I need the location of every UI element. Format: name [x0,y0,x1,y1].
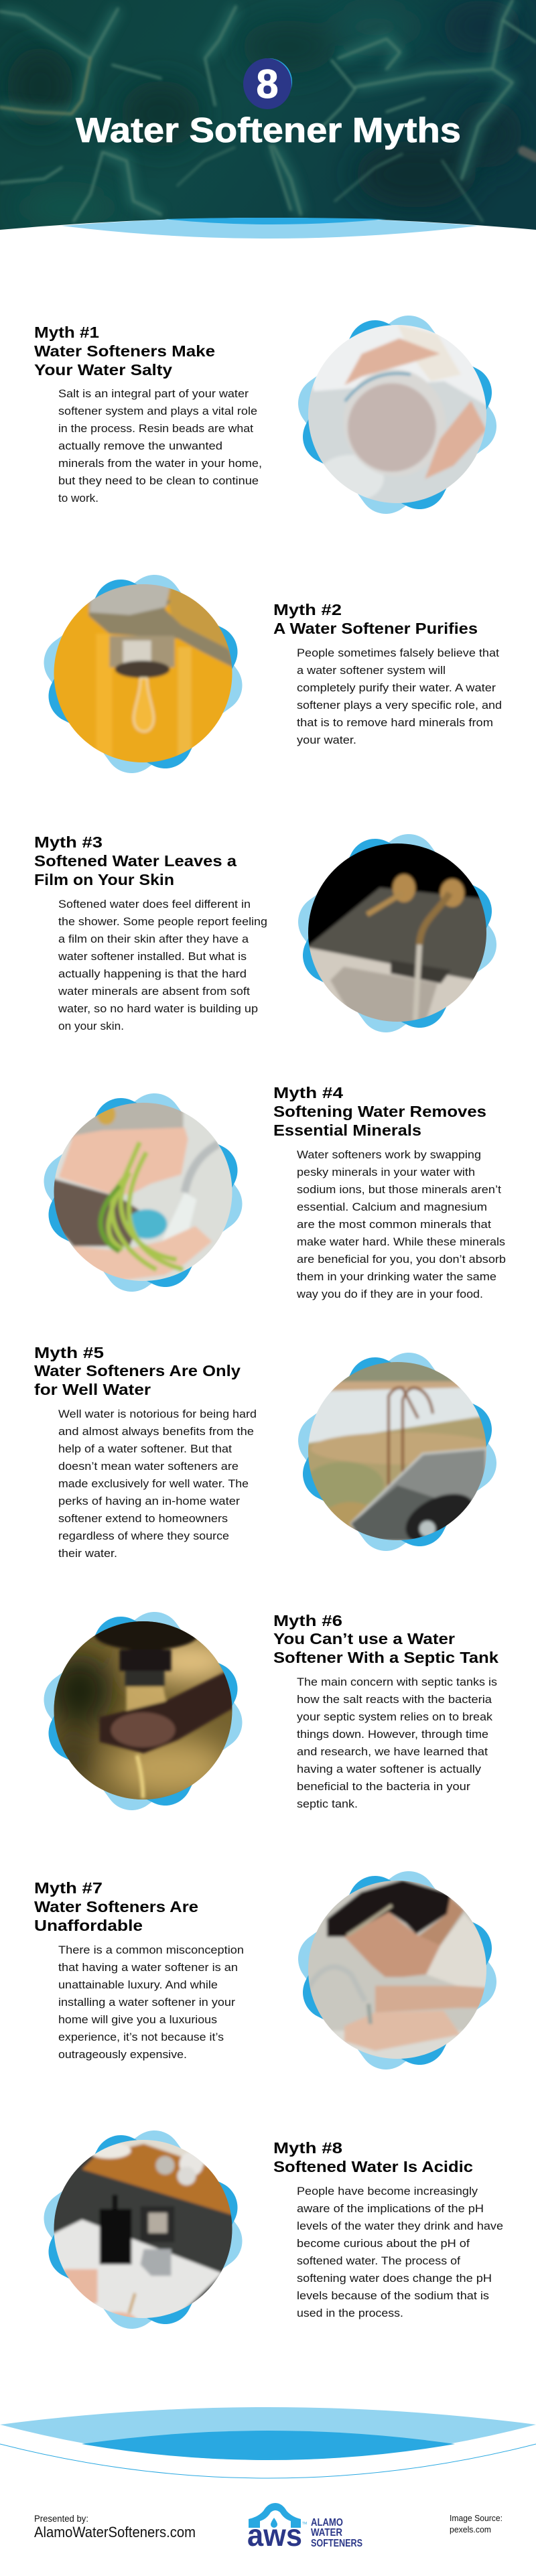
text: myth 4 body: way you do if they are in your food. [296,1288,483,1300]
heading: myth 4: Essential Minerals [273,1122,421,1139]
text: myth 3 body: Softened water does feel different in [58,898,251,910]
panel: myth 2 [50,580,502,768]
text: myth 7 body: installing a water softener in your [58,1996,236,2009]
footer wave [0,2407,536,2478]
text: myth 1 body: softener system and plays a vital role [58,405,257,417]
footer: image source: Image Source: [450,2513,503,2523]
panel: myth 4 [50,1084,506,1300]
text: myth 8 body: used in the process. [297,2307,403,2319]
footer: presented by: Presented by: [34,2513,88,2524]
panel: myth 7 [34,1877,491,2064]
text: myth 3 body [58,898,267,1032]
thin wave line [0,2444,536,2478]
heading: myth 3: Film on Your Skin [34,871,174,888]
logo: Alamo Water Softeners: TM [302,2522,307,2526]
text: myth 2 body: your water. [297,734,356,746]
text: myth 6 body [297,1676,497,1810]
footer: presented by [34,2513,196,2540]
panel: myth 5 [34,1344,498,1560]
text: myth 8 body [297,2185,503,2319]
text: myth 6 body: beneficial to the bacteria in your [297,1781,471,1793]
dark blue lens [82,2431,455,2460]
text: myth 7 body [58,1944,244,2061]
text: myth 5 body: perks of having an in-home water [58,1495,241,1507]
heading: myth 5: Water Softeners Are Only [34,1362,241,1379]
text: myth 1 body: in the process. Resin beads are what [58,423,253,435]
text: myth 8 body: levels of the water they drink and have [297,2220,503,2232]
text: myth 6 body: how the salt reacts with the bacteria [297,1694,492,1706]
text: myth 6 body: The main concern with septic tanks is [297,1676,497,1688]
logo: Alamo Water Softeners [247,2503,362,2553]
text: myth 8 body: People have become increasingly [297,2185,478,2197]
text: myth 4 body: essential. Calcium and magnesium [297,1201,487,1213]
heading: myth 7: Unaffordable [34,1917,143,1934]
heading: myth 8 [273,2139,473,2175]
panel: myth 3 [34,833,491,1032]
heading: myth 4: Myth #4 [273,1084,343,1101]
text: myth 2 body: that is to remove hard minerals from [297,717,493,729]
text: myth 1 body: but they need to be clean to continue [58,475,259,487]
footer: presented by: AlamoWaterSofteners.com [34,2524,196,2540]
text: myth 3 body: actually happening is that the hard [58,968,247,980]
text: myth 6 body: having a water softener is actually [297,1763,482,1775]
text: myth 1 body: minerals from the water in your home, [58,458,262,470]
text: myth 3 body: the shower. Some people report feeling [58,916,267,928]
text: myth 6 body: your septic system relies on to break [297,1711,493,1723]
text: myth 2 body: completely purify their water. A water [297,682,496,694]
text: myth 7 body: that having a water softener is an [58,1962,238,1974]
text: myth 6 body: and research, we have learned that [297,1746,488,1758]
heading: myth 5 [34,1344,241,1398]
photo: hands rinsing green vegetables under faucet [50,1099,237,1286]
heading: myth 5: Myth #5 [34,1344,104,1361]
icon: number badge [243,58,292,109]
text: myth 2 body: a water softener system will [297,665,446,677]
photo: woman drinking from a faucet [304,1877,491,2064]
icon: arch with water drop [249,2503,301,2528]
panel: myth 8 [50,2136,503,2328]
heading: myth 7: Water Softeners Are [34,1898,198,1915]
text: myth 7 body: home will give you a luxurious [58,2014,217,2026]
text: myth 7 body: There is a common misconception [58,1944,244,1956]
text: myth 4 body: pesky minerals in your water with [297,1166,475,1178]
text: myth 4 body: Water softeners work by swapping [297,1149,481,1161]
photo: dripping faucet on orange background [50,580,237,768]
heading: myth 1: Water Softeners Make [34,342,215,360]
text: myth 1 body: actually remove the unwanted [58,440,222,452]
text: myth 8 body: softening water does change the pH [297,2273,492,2285]
text: myth 7 body: unattainable luxury. And while [58,1979,218,1991]
heading: myth 6 [273,1612,498,1666]
heading: myth 6: Softener With a Septic Tank [273,1649,498,1666]
text: myth 5 body: softener extend to homeowners [58,1513,228,1525]
light blue lens [0,2407,536,2460]
text: myth 4 body: are the most common minerals that [297,1219,491,1231]
heading: myth 7 [34,1879,198,1934]
text: myth 4 body: them in your drinking water the same [297,1271,496,1283]
text: myth 4 body: sodium ions, but those minerals aren’t [297,1184,501,1196]
text: myth 2 body: People sometimes falsely believe that [297,647,499,659]
logo: Alamo Water Softeners: SOFTENERS [311,2538,362,2549]
icon: number badge: 8 [256,62,279,107]
light blue lens [62,218,478,239]
heading: myth 4: Softening Water Removes [273,1103,486,1120]
heading: myth 6: You Can’t use a Water [273,1630,455,1647]
heading: myth 1: Your Water Salty [34,361,172,379]
panel: myth 6 [46,1612,498,1810]
text: myth 8 body: levels because of the sodium that is [297,2290,489,2302]
text: myth 4 body: make water hard. While these minerals [297,1236,505,1248]
heading: myth 3 [34,833,237,888]
text: myth 5 body: and almost always benefits from the [58,1426,254,1438]
text: myth 2 body: softener plays a very specific role, and [297,699,502,711]
text: myth 3 body: water minerals are absent from soft [58,986,250,998]
text: myth 7 body: outrageously expensive. [58,2049,187,2061]
photo: bathroom sink with soap dispenser [50,2136,237,2328]
heading: myth 6: Myth #6 [273,1612,342,1629]
text: myth 3 body: a film on their skin after they have a [58,933,249,945]
panel: myth 1 [34,321,491,509]
text: myth 7 body: experience, it’s not because it’s [58,2031,224,2043]
photo: hands pouring salt from a glass bowl [304,321,491,509]
text: myth 5 body: Well water is notorious for being hard [58,1408,257,1420]
heading: myth 5: for Well Water [34,1381,151,1398]
heading: myth 4 [273,1084,486,1139]
photo: gold wall faucet over sink [304,839,491,1027]
text: myth 1 body: to work. [58,492,98,504]
text: myth 5 body: their water. [58,1548,117,1560]
text: myth 5 body: made exclusively for well water. The [58,1478,249,1490]
footer: image source [450,2513,503,2534]
heading: myth 2: Myth #2 [273,601,342,618]
text: myth 5 body: doesn’t mean water softeners are [58,1461,239,1473]
photo: outdoor copper tap filling a metal tub [304,1358,498,1554]
heading: myth 7: Myth #7 [34,1879,103,1897]
text: myth 4 body: are beneficial for you, you don’t absorb [297,1253,506,1266]
photo: hand under water from outdoor tap at sunset [46,1617,240,1805]
heading: myth 3: Softened Water Leaves a [34,852,237,870]
heading: myth 3: Myth #3 [34,833,103,851]
logo: Alamo Water Softeners: ALAMO [311,2517,343,2528]
title: Water Softener Myths [76,111,461,150]
dark blue lens [164,218,387,224]
heading: myth 8: Myth #8 [273,2139,342,2157]
heading: myth 1 [34,324,215,379]
text: myth 3 body: water softener installed. But what is [58,951,247,963]
text: myth 5 body [58,1408,257,1560]
text: myth 8 body: become curious about the pH of [297,2238,470,2250]
text: myth 8 body: softened water. The process of [297,2255,460,2267]
logo: Alamo Water Softeners: aws [247,2518,302,2553]
text: myth 3 body: on your skin. [58,1020,124,1032]
text: myth 4 body [296,1149,506,1300]
heading: myth 2: A Water Softener Purifies [273,620,478,637]
header banner [0,0,536,268]
heading: myth 8: Softened Water Is Acidic [273,2158,473,2175]
text: myth 1 body [58,388,262,504]
heading: myth 1: Myth #1 [34,324,99,341]
text: myth 6 body: septic tank. [297,1798,358,1810]
text: myth 5 body: help of a water softener. But that [58,1443,232,1455]
logo: Alamo Water Softeners: WATER [311,2527,342,2538]
text: myth 3 body: water, so no hard water is building up [58,1003,258,1015]
text: myth 2 body [297,647,502,746]
white wave [0,218,536,268]
text: myth 1 body: Salt is an integral part of your water [58,388,249,400]
heading: myth 2 [273,601,478,637]
text: myth 5 body: regardless of where they source [58,1530,229,1542]
water background photo [0,0,536,232]
text: myth 8 body: aware of the implications of the pH [297,2203,484,2215]
footer: image source: pexels.com [450,2524,491,2534]
text: myth 6 body: things down. However, through time [297,1728,488,1741]
